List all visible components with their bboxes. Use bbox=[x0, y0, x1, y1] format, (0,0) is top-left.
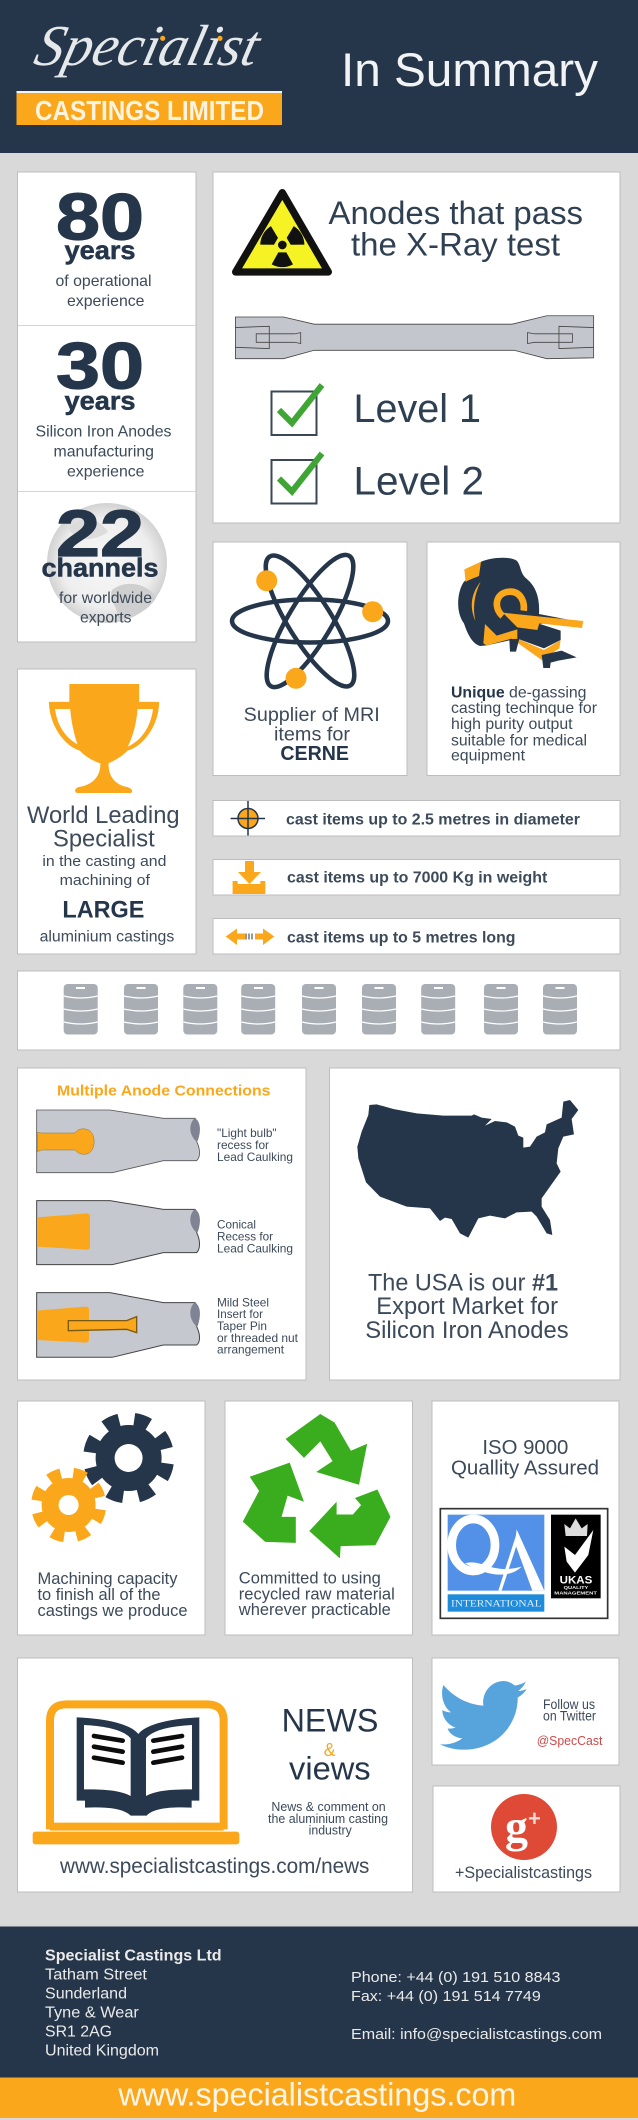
icon: google plus: + bbox=[528, 1806, 541, 1831]
diagram: light bulb recess bbox=[37, 1110, 293, 1173]
checklist: level 2 bbox=[272, 454, 484, 504]
caption: @SpecCast bbox=[537, 1733, 603, 1748]
caption bbox=[244, 704, 380, 765]
description: the aluminium casting bbox=[268, 1812, 388, 1826]
address bbox=[45, 1948, 222, 2059]
checklist: level 1 bbox=[272, 385, 481, 435]
map: USA bbox=[357, 1100, 578, 1238]
diagram: mild steel insert: or threaded nut bbox=[217, 1331, 299, 1345]
text block: LARGE bbox=[62, 897, 144, 924]
address: Specialist Castings Ltd bbox=[45, 1948, 222, 1964]
panel: google plus bbox=[433, 1786, 620, 1892]
stat: 80 years bbox=[56, 180, 152, 310]
phone and email bbox=[351, 1969, 602, 2043]
heading: the X-Ray test bbox=[351, 226, 560, 262]
stat: 30 years: years bbox=[64, 386, 136, 416]
footer: contact details bbox=[0, 1926, 638, 2078]
diagram: conical recess: Conical bbox=[217, 1218, 256, 1232]
diagram: mild steel insert: Taper Pin bbox=[217, 1319, 267, 1333]
bar: length: cast items up to 5 metres long bbox=[287, 930, 516, 947]
heading: NEWS bbox=[282, 1703, 378, 1739]
panel: world leading specialist bbox=[18, 669, 196, 954]
icon: atom bbox=[232, 545, 388, 697]
header band bbox=[0, 0, 638, 153]
panel: X-ray test bbox=[213, 172, 620, 523]
phone and email: Fax: +44 (0) 191 514 7749 bbox=[351, 1988, 541, 2005]
phone and email: Email: info@specialistcastings.com bbox=[351, 2026, 602, 2043]
caption bbox=[365, 1269, 569, 1344]
description: News & comment on bbox=[271, 1800, 386, 1814]
icon: crosshair bbox=[231, 801, 265, 836]
diagram: light bulb recess: Lead Caulking bbox=[217, 1150, 293, 1164]
logo: QA International and UKAS bbox=[440, 1509, 608, 1618]
icon: weight arrow bbox=[233, 861, 265, 894]
stat: 22 channels: for worldwide bbox=[59, 590, 152, 607]
bar: diameter bbox=[213, 800, 620, 836]
logo: QA International and UKAS: UKAS bbox=[560, 1574, 592, 1586]
stat: 30 years: Silicon Iron Anodes bbox=[36, 424, 172, 440]
stat: 30 years: 30 bbox=[56, 328, 144, 402]
caption: equipment bbox=[451, 747, 526, 764]
icon: gears bbox=[34, 1415, 172, 1540]
icon: MRI scanner bbox=[458, 558, 583, 668]
heading bbox=[328, 195, 583, 262]
address: Sunderland bbox=[45, 1986, 127, 2003]
address: SR1 2AG bbox=[45, 2024, 112, 2040]
caption: Follow us bbox=[543, 1697, 595, 1712]
caption bbox=[238, 1569, 395, 1619]
panel: news and views bbox=[18, 1658, 412, 1892]
diagram: mild steel insert: Mild Steel bbox=[217, 1295, 269, 1309]
caption: recycled raw material bbox=[239, 1585, 395, 1603]
caption: The USA is our #1 bbox=[368, 1269, 558, 1296]
logo: QA International and UKAS: QUALITY bbox=[564, 1585, 588, 1590]
link: www.specialistcastings.com/news bbox=[59, 1855, 369, 1878]
phone and email: Phone: +44 (0) 191 510 8843 bbox=[351, 1969, 560, 1986]
stat: 80 years: years bbox=[64, 235, 136, 265]
caption: +Specialistcastings bbox=[455, 1864, 592, 1882]
icon: globe bbox=[47, 503, 167, 623]
caption: CERNE bbox=[280, 743, 349, 765]
panel: MRI supplier bbox=[213, 542, 407, 776]
stat: 80 years: experience bbox=[67, 293, 145, 310]
panel: company statistics bbox=[18, 172, 196, 642]
text block: World Leading bbox=[27, 803, 180, 829]
caption: wherever practicable bbox=[238, 1601, 391, 1619]
text block bbox=[27, 803, 180, 946]
panel: MRI scanner casting technique bbox=[427, 542, 620, 776]
heading: Quallity Assured bbox=[451, 1457, 599, 1479]
caption: to finish all of the bbox=[38, 1586, 160, 1604]
stat: 30 years: manufacturing bbox=[54, 444, 154, 460]
caption: Committed to using bbox=[239, 1569, 381, 1587]
caption: casting techinque for bbox=[451, 700, 597, 717]
diagram: conical recess bbox=[37, 1201, 293, 1265]
heading bbox=[451, 1437, 599, 1479]
stat: 22 channels: channels bbox=[42, 552, 158, 582]
diagram: mild steel insert bbox=[37, 1293, 299, 1357]
heading: ISO 9000 bbox=[482, 1437, 568, 1459]
caption bbox=[537, 1697, 603, 1748]
heading: & bbox=[324, 1740, 336, 1760]
caption: suitable for medical bbox=[451, 732, 587, 749]
caption: items for bbox=[274, 724, 350, 746]
checklist: level 2: Level 2 bbox=[354, 460, 484, 504]
stat: 30 years bbox=[36, 328, 172, 480]
diagram: conical recess: Recess for bbox=[217, 1229, 273, 1243]
bar: diameter: cast items up to 2.5 metres in diameter bbox=[286, 812, 580, 829]
caption: Machining capacity bbox=[38, 1570, 178, 1588]
panel: twitter bbox=[432, 1658, 619, 1765]
text block: machining of bbox=[60, 872, 151, 889]
icon: recycling arrows bbox=[243, 1414, 390, 1558]
stat: 22 channels: exports bbox=[80, 610, 132, 626]
logo: QA International and UKAS: MANAGEMENT bbox=[554, 1591, 597, 1596]
title: In Summary bbox=[341, 44, 598, 97]
heading: views bbox=[289, 1750, 371, 1787]
heading bbox=[282, 1703, 378, 1787]
footer: website bar bbox=[0, 2075, 638, 2118]
caption: Supplier of MRI bbox=[244, 704, 380, 726]
footer: website bar: www.specialistcastings.com bbox=[117, 2075, 516, 2112]
diagram: light bulb recess: recess for bbox=[217, 1138, 269, 1152]
icon: google plus bbox=[491, 1794, 557, 1860]
icon: laptop with book bbox=[33, 1704, 239, 1844]
panel: USA export market bbox=[330, 1068, 620, 1380]
caption: Silicon Iron Anodes bbox=[365, 1317, 569, 1344]
caption: on Twitter bbox=[543, 1709, 596, 1724]
panel: machining capacity bbox=[18, 1401, 205, 1635]
panel: recycled material bbox=[225, 1401, 412, 1635]
icon: anode drawing bbox=[235, 316, 594, 359]
diagram: conical recess: Lead Caulking bbox=[217, 1242, 293, 1256]
caption: Export Market for bbox=[376, 1293, 558, 1320]
description bbox=[268, 1800, 388, 1838]
icon: trophy bbox=[49, 684, 159, 793]
icon: double arrow bbox=[226, 928, 274, 945]
text block: in the casting and bbox=[42, 853, 166, 870]
bar: weight: cast items up to 7000 Kg in weight bbox=[287, 870, 547, 887]
text block: Specialist bbox=[53, 826, 155, 852]
heading: Multiple Anode Connections bbox=[57, 1082, 270, 1100]
logo: Castings Limited bar: CASTINGS LIMITED bbox=[35, 95, 264, 126]
address: United Kingdom bbox=[45, 2042, 159, 2059]
diagram: mild steel insert: Insert for bbox=[217, 1307, 263, 1321]
panel: row of ingots bbox=[18, 971, 620, 1050]
logo: QA International and UKAS: INTERNATIONAL bbox=[451, 1600, 542, 1610]
address: Tatham Street bbox=[45, 1966, 148, 1983]
heading: Anodes that pass bbox=[328, 195, 583, 231]
caption: Unique de-gassing bbox=[451, 685, 586, 702]
icon: radiation warning triangle bbox=[236, 193, 328, 272]
panel: multiple anode connections bbox=[18, 1068, 306, 1380]
address: Tyne & Wear bbox=[45, 2005, 139, 2022]
icon: google plus: g bbox=[505, 1801, 528, 1852]
checklist: level 1: Level 1 bbox=[354, 387, 481, 431]
caption bbox=[38, 1570, 188, 1620]
description: industry bbox=[309, 1824, 353, 1838]
caption: high purity output bbox=[451, 716, 573, 733]
stat: 22 channels bbox=[42, 496, 167, 626]
bar: length bbox=[213, 918, 620, 954]
stat: 80 years: 80 bbox=[56, 180, 144, 254]
diagram: mild steel insert: arrangement bbox=[217, 1343, 285, 1357]
diagram: light bulb recess: "Light bulb" bbox=[217, 1126, 277, 1140]
stat: 22 channels: 22 bbox=[56, 496, 144, 570]
caption bbox=[451, 685, 597, 764]
panel: ISO 9000 bbox=[432, 1401, 619, 1635]
logo: Specialist script: Specialist bbox=[29, 14, 268, 78]
icon: twitter bird bbox=[440, 1681, 527, 1750]
stat: 30 years: experience bbox=[67, 464, 145, 480]
caption: castings we produce bbox=[38, 1602, 188, 1620]
stat: 80 years: of operational bbox=[56, 273, 152, 290]
text block: aluminium castings bbox=[40, 929, 175, 946]
bar: weight bbox=[213, 860, 620, 895]
